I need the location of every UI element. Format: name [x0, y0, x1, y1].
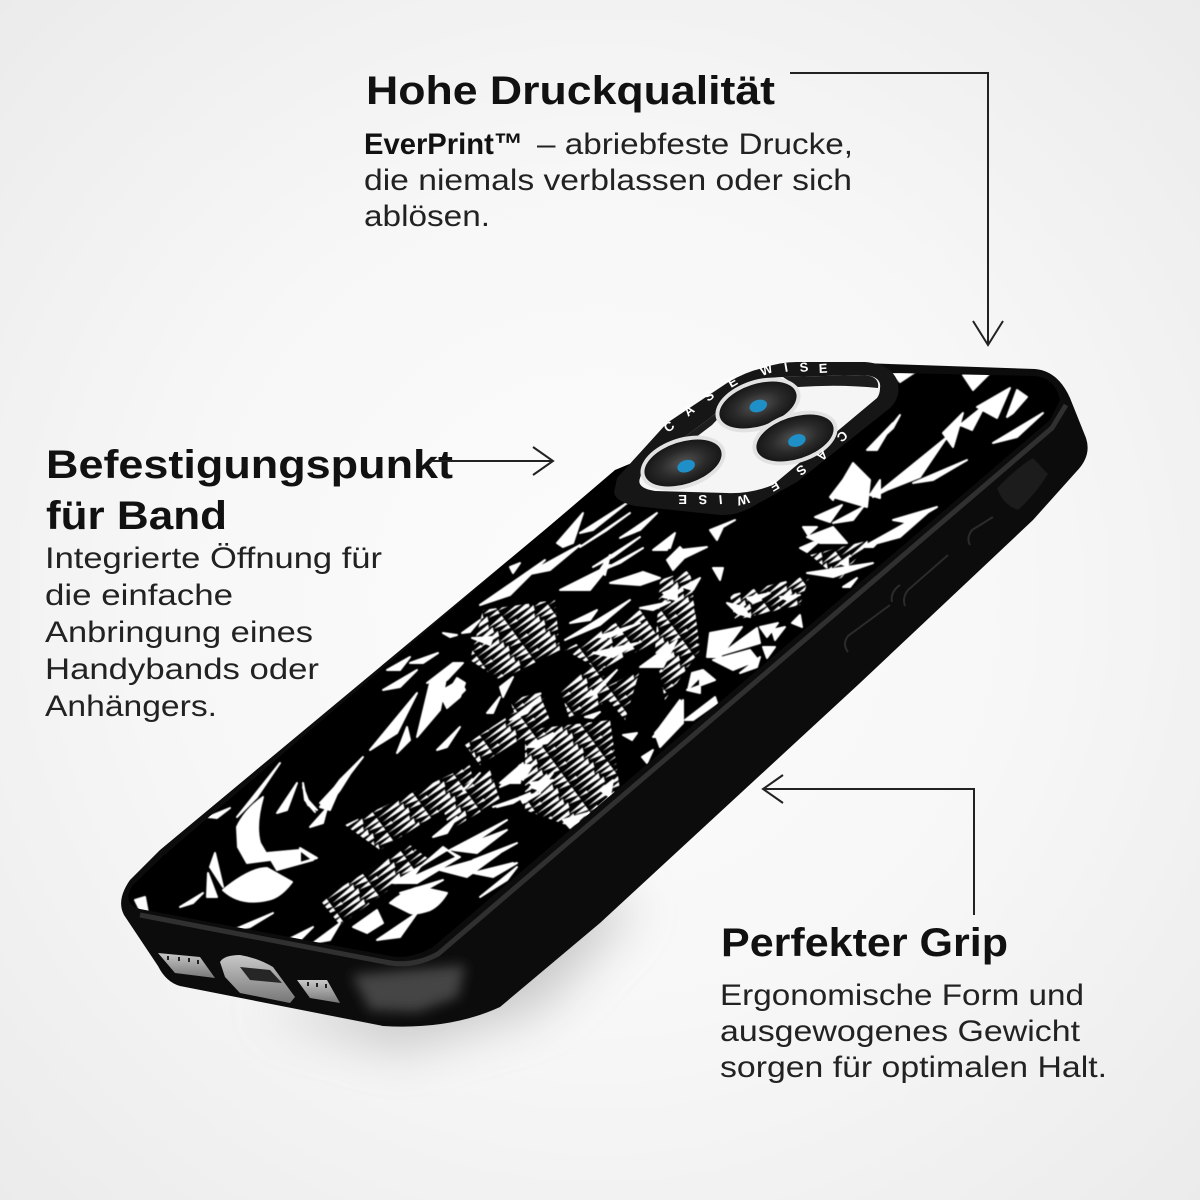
- lens left: [633, 426, 733, 500]
- body: strap text: Integrierte Öffnung für: [45, 542, 382, 575]
- abstract print: [135, 372, 1043, 943]
- side buttons: [845, 517, 993, 652]
- speaker left: [158, 953, 215, 978]
- arrow: to camera: [430, 447, 553, 475]
- case body: [121, 362, 1088, 1027]
- body: strap text: Anbringung eines: [45, 616, 313, 649]
- fine mesh clusters: [320, 540, 870, 925]
- body: strap text: die einfache: [45, 579, 233, 612]
- camera window: [639, 375, 880, 493]
- side key patch: [997, 458, 1048, 510]
- lens right: [745, 401, 845, 475]
- body: EverPrint text: die niemals verblassen oder sich: [364, 164, 852, 197]
- body: grip text: sorgen für optimalen Halt.: [720, 1051, 1107, 1084]
- brand text lower: CASEWISE: [678, 428, 851, 509]
- speaker right: [297, 980, 340, 1003]
- brand text upper: CASEWISE: [661, 359, 828, 435]
- rim line: [140, 405, 1066, 964]
- body: grip text: Ergonomische Form und: [720, 979, 1084, 1012]
- back panel: [128, 372, 1060, 957]
- body: strap text: Handybands oder: [45, 653, 319, 686]
- heading: Perfekter Grip: Perfekter Grip: [721, 921, 1008, 965]
- heading: Hohe Druckqualität: Hohe Druckqualität: [366, 69, 775, 113]
- body: EverPrint text: [364, 128, 853, 233]
- heading: Befestigungspunkt für Band: Befestigungspunkt: [46, 443, 453, 487]
- arrow: to side of case: [763, 775, 974, 915]
- arrow: to top of case: [790, 73, 1003, 345]
- USB-C port: [220, 955, 295, 1003]
- corner wall highlight: [352, 965, 465, 1012]
- body: grip text: [720, 979, 1107, 1084]
- callout: strap attachment: [45, 443, 453, 723]
- body: EverPrint text: ablösen.: [364, 200, 490, 233]
- phone shadow: [260, 900, 640, 1050]
- body: strap text: Anhängers.: [45, 690, 217, 723]
- heading: Befestigungspunkt für Band: für Band: [46, 494, 227, 538]
- heading: Befestigungspunkt für Band: [46, 443, 453, 538]
- body: grip text: ausgewogenes Gewicht: [720, 1015, 1081, 1048]
- body: EverPrint text: – abriebfeste Drucke,: [537, 128, 853, 161]
- phone case: [121, 359, 1088, 1027]
- callout: perfect grip: [720, 921, 1107, 1084]
- window inner shadow top: [647, 375, 878, 472]
- body: strap text: [45, 542, 382, 723]
- camera island: [614, 362, 898, 515]
- body: EverPrint text: EverPrint™: [364, 128, 523, 161]
- callout: print quality: [364, 69, 853, 233]
- lens top: [708, 368, 808, 442]
- large shards: [135, 372, 1043, 943]
